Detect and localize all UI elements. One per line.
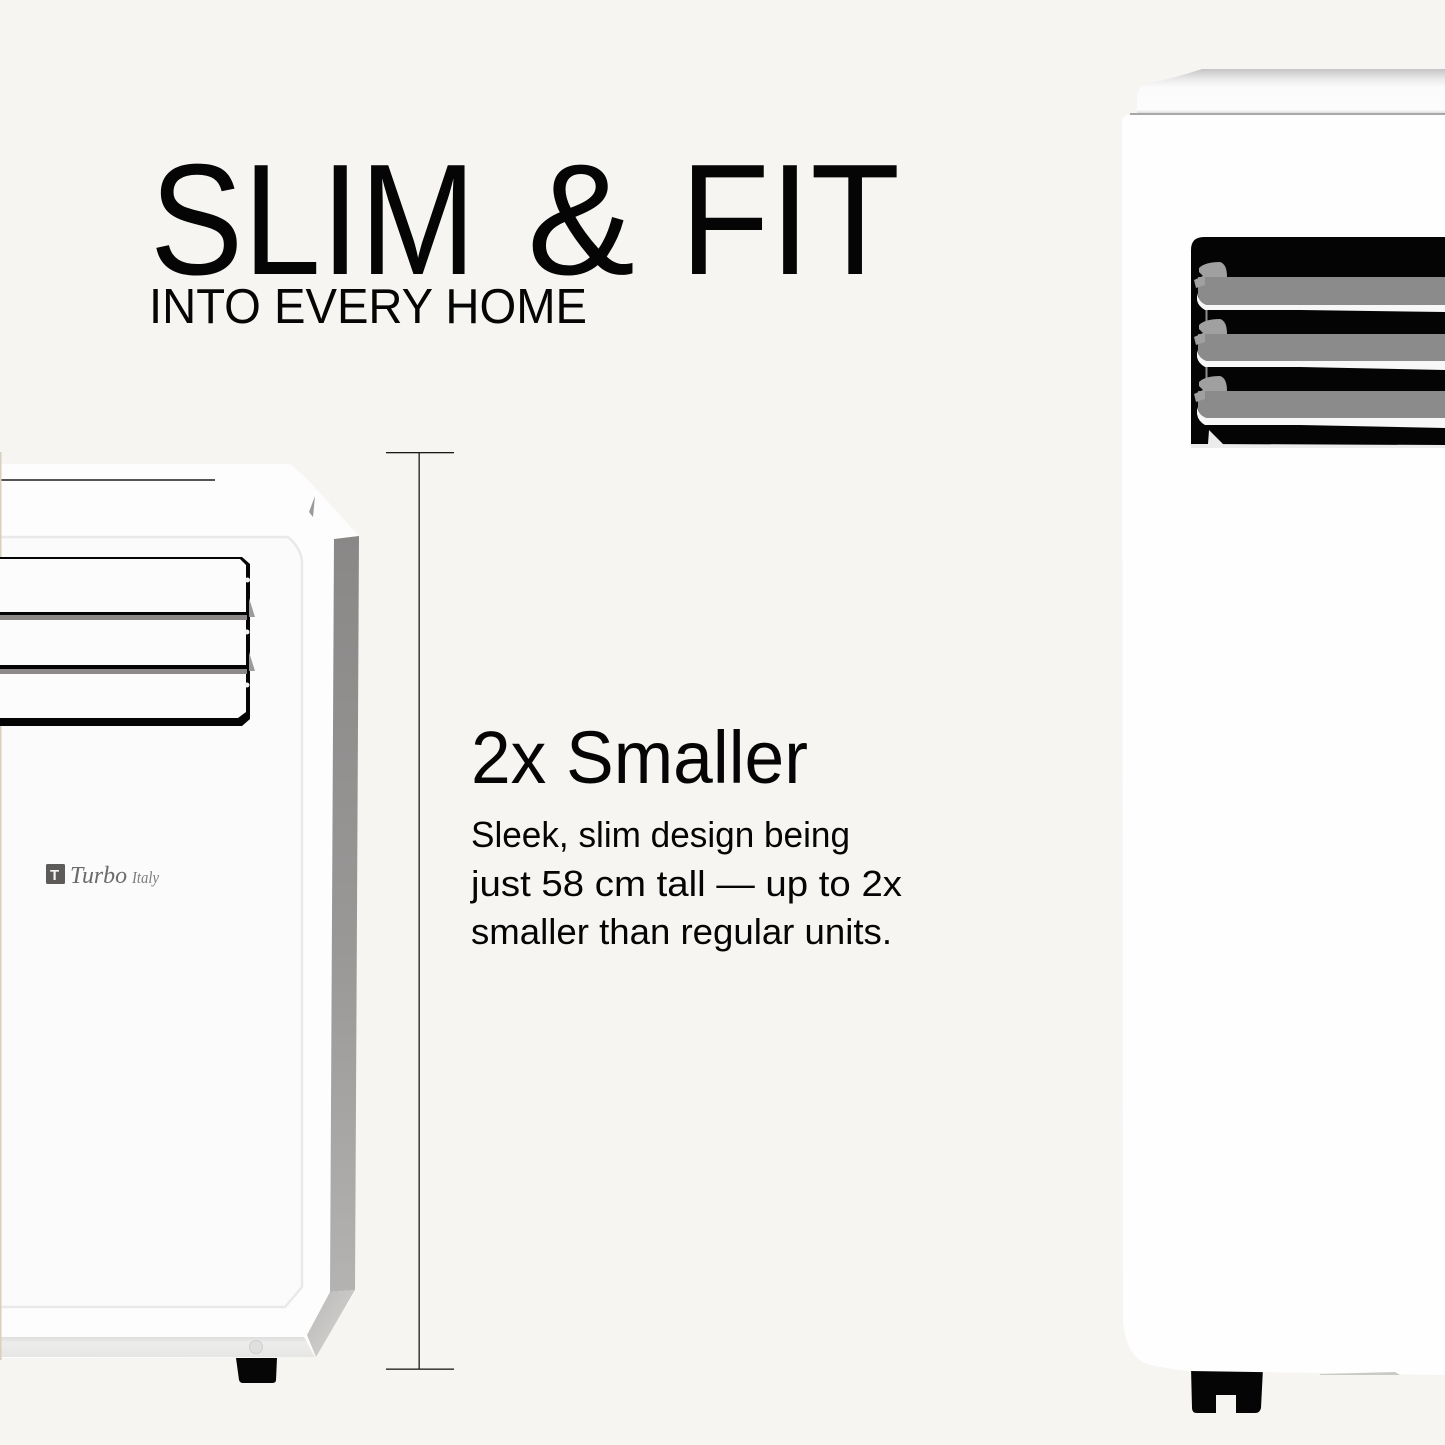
louver 2 [1194, 319, 1445, 392]
height dimension line [386, 452, 454, 1370]
vent [1191, 237, 1445, 448]
louver knob [1194, 376, 1227, 402]
hinge dot 2 [244, 630, 250, 634]
hinge dot 1 [245, 578, 250, 582]
lower chamfer [307, 1290, 355, 1357]
hinge dot 3 [244, 682, 250, 688]
callout body text [470, 814, 902, 952]
line 2: just 58 cm tall — up to 2x [470, 863, 902, 904]
upper chamfer crease [309, 496, 315, 517]
bottom band [0, 1337, 315, 1357]
product: regular portable air conditioner (right) [1122, 69, 1445, 1413]
word: FIT: FIT [680, 132, 900, 308]
louver 3 [1194, 376, 1445, 428]
louver connector [1206, 310, 1208, 335]
louver highlight [1197, 350, 1445, 370]
louver shadow 2 [0, 669, 247, 674]
line 1: Sleek, slim design being [471, 814, 850, 855]
louver blade [1198, 391, 1445, 418]
vent sill [1191, 430, 1445, 448]
louver knob [1194, 319, 1227, 345]
top tick [386, 452, 454, 453]
lid [1137, 69, 1445, 114]
louver highlight [1197, 293, 1445, 312]
word: SLIM: SLIM [150, 132, 476, 308]
callout heading: 2x Smaller [471, 716, 808, 799]
line 3: smaller than regular units. [471, 911, 892, 952]
logo T: T [50, 867, 59, 884]
grey side panel [330, 536, 359, 1292]
louver 1 [0, 559, 246, 612]
louver 2 [0, 620, 246, 665]
vent [0, 557, 255, 726]
vent opening [1191, 237, 1445, 445]
vent frame [0, 557, 250, 726]
body [1122, 114, 1445, 1375]
louver 3 [0, 674, 246, 718]
unit body [0, 464, 359, 1358]
screw [250, 1340, 262, 1354]
louver blade [1198, 334, 1445, 361]
ampersand: & [527, 132, 635, 308]
title [150, 132, 900, 308]
brand logo [46, 863, 159, 889]
louver 1 [1194, 262, 1445, 335]
louver connector [1206, 367, 1208, 392]
brand country: Italy [131, 868, 159, 887]
product: small portable air conditioner (left) [0, 452, 359, 1383]
tan left edge [0, 452, 2, 1360]
louver shadow 1 [0, 615, 247, 620]
louver tab 1 [249, 598, 255, 617]
bottom tick [386, 1368, 454, 1370]
lid seam [1130, 113, 1445, 115]
louver highlight [1197, 407, 1445, 428]
louver knob [1194, 262, 1227, 288]
base shadow [1320, 1372, 1400, 1375]
wheel [236, 1358, 277, 1383]
louver tab 2 [249, 652, 255, 671]
front panel outline [0, 537, 302, 1307]
lid seam [0, 479, 215, 481]
vertical line [418, 452, 420, 1369]
wheel [1191, 1368, 1263, 1413]
louver blade [1198, 277, 1445, 305]
logo badge [46, 864, 65, 884]
subtitle: INTO EVERY HOME [149, 280, 587, 334]
brand name: Turbo [70, 863, 127, 889]
